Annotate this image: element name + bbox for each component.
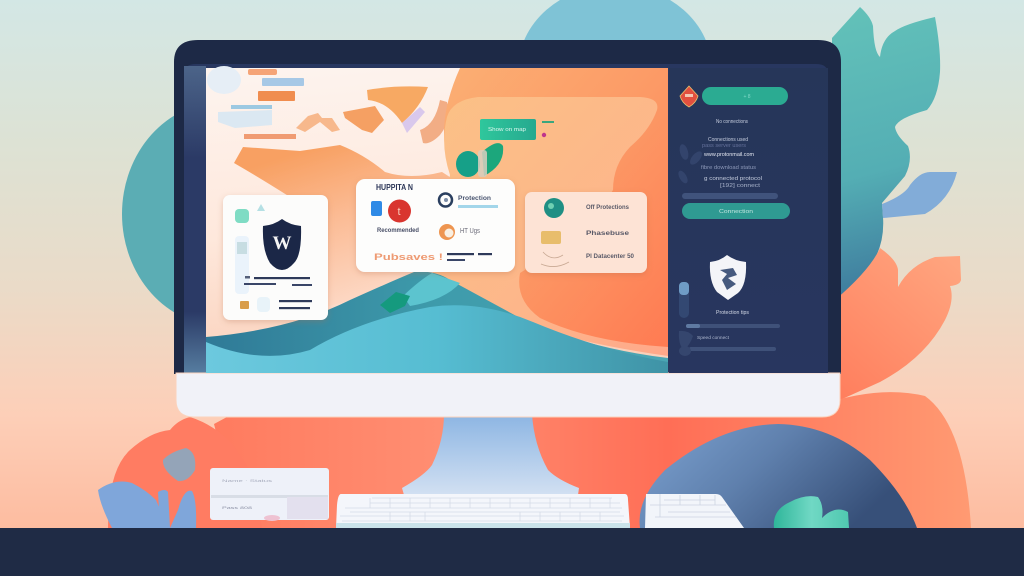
line one — [254, 277, 310, 279]
desk card — [210, 468, 329, 521]
track — [679, 282, 689, 318]
line six: g connected protocol — [704, 176, 762, 182]
track — [686, 324, 780, 328]
balloon — [544, 198, 564, 218]
badge glyph: t — [397, 206, 401, 218]
red badge — [388, 200, 411, 222]
blue icon — [371, 201, 382, 216]
line five — [279, 307, 310, 309]
monitor stand — [402, 414, 579, 495]
highlight — [548, 203, 554, 209]
bottom front wave — [206, 305, 668, 373]
orb centre — [478, 150, 487, 177]
blue tag — [262, 78, 304, 86]
fill — [686, 324, 700, 328]
gem highlight — [685, 94, 693, 97]
orange leaf — [835, 248, 961, 400]
key dividers — [370, 498, 610, 521]
left glass strip — [184, 66, 206, 373]
orb left — [456, 151, 480, 177]
green action button — [682, 203, 790, 219]
card text: Name · Status — [222, 478, 272, 483]
stat three label: Pl Datacenter 50 — [586, 254, 635, 260]
globe badge — [207, 66, 241, 94]
sidebar faint leaves — [676, 143, 704, 185]
ring core — [444, 228, 454, 238]
leaf one — [678, 143, 690, 161]
gold icon — [240, 301, 249, 309]
cloud core — [444, 198, 448, 202]
pill — [702, 87, 788, 105]
keyboard body — [336, 494, 630, 528]
gem body — [680, 86, 698, 107]
green balloon icon — [544, 198, 564, 218]
map east coast — [420, 100, 448, 143]
card small text: Pass 808 — [222, 505, 253, 510]
map lavender sliver — [402, 107, 425, 133]
card heading: HUPPITA N — [376, 183, 413, 192]
leaf two — [688, 149, 704, 167]
blue plant — [98, 482, 196, 528]
bullet — [245, 276, 250, 278]
line one: No connections — [716, 119, 748, 125]
right teal leaf — [832, 7, 940, 297]
keyboard — [336, 494, 630, 528]
line three — [292, 284, 312, 286]
monitor chin — [176, 373, 840, 417]
line two — [244, 283, 276, 285]
screen background — [206, 68, 668, 373]
slider bar — [682, 193, 778, 199]
card image panel — [287, 497, 328, 519]
left coral plant — [108, 417, 262, 528]
card base — [223, 195, 328, 320]
shield body — [263, 219, 301, 270]
sidebar background — [669, 68, 828, 373]
card base — [356, 179, 515, 272]
green plant — [774, 496, 849, 528]
light blue card — [218, 110, 272, 128]
map centre block — [343, 106, 384, 133]
pale square — [257, 297, 270, 312]
map landmass north — [367, 86, 428, 123]
blue underline — [458, 205, 498, 208]
line one — [447, 253, 474, 255]
card band — [211, 495, 328, 498]
shield monogram: W — [272, 233, 292, 254]
line four — [279, 300, 312, 302]
blue panel — [235, 236, 249, 294]
monitor bezel — [174, 40, 841, 374]
callout dash — [542, 121, 554, 123]
orange button — [258, 91, 295, 101]
light orange panel — [433, 97, 668, 356]
bottom back wave — [206, 272, 668, 373]
row one — [345, 498, 622, 508]
pill label: + 8 — [743, 94, 751, 100]
callout label: Show on map — [488, 127, 526, 133]
bottom dark band — [0, 528, 1024, 576]
small icon two — [679, 346, 691, 356]
left security card — [223, 195, 328, 320]
monitor top glass — [184, 64, 828, 373]
stat two label: Phasebuse — [586, 231, 630, 237]
top blue blob — [518, 0, 712, 155]
dark lines — [447, 253, 492, 261]
green status icon — [235, 209, 249, 223]
blue mound — [640, 424, 917, 528]
ring label: HT Ugs — [460, 228, 480, 235]
line four: www.protonmail.com — [704, 152, 754, 158]
numeric keypad — [645, 494, 744, 528]
small heart icon — [679, 331, 693, 350]
light blue bar — [231, 105, 272, 109]
monitor — [174, 40, 841, 417]
right stats card — [525, 192, 647, 273]
decorative background shapes — [98, 0, 971, 528]
handle — [679, 282, 689, 295]
white shield icon — [710, 255, 746, 300]
teal fin shape — [403, 273, 460, 306]
large coral base shape — [214, 392, 971, 528]
progress bar one — [686, 324, 780, 328]
line five: fibre download status — [701, 165, 757, 171]
main screen — [206, 66, 668, 373]
curve icon — [541, 252, 569, 267]
pink blot — [264, 515, 280, 521]
card base — [525, 192, 647, 273]
sidebar panel — [669, 68, 828, 373]
orange label bar — [244, 134, 296, 139]
green callout — [480, 119, 554, 140]
map landmass large — [234, 145, 470, 320]
blue triangle — [257, 204, 265, 211]
line seven: [192] connect — [720, 183, 761, 189]
orange tag — [248, 69, 277, 75]
card body — [210, 468, 329, 520]
ring — [439, 224, 455, 240]
badge circle — [388, 200, 411, 222]
left teal circle — [122, 102, 322, 326]
line two — [478, 253, 492, 255]
green fin shape — [380, 292, 410, 313]
keyboard keys — [340, 498, 624, 521]
shield body — [710, 255, 746, 300]
keyboard base glow — [336, 523, 630, 528]
green pill button — [702, 87, 788, 105]
cloud label: Protection — [458, 196, 491, 202]
map legend tags — [207, 66, 304, 139]
line three: pass server users — [702, 143, 747, 149]
orange ring icon — [439, 224, 455, 240]
button shape — [682, 203, 790, 219]
callout pill — [480, 119, 536, 140]
shield caption: Protection tips — [716, 310, 750, 316]
shield emblem — [720, 268, 737, 290]
button label: Connection — [719, 209, 753, 215]
keypad keys — [650, 494, 736, 517]
blue leaf — [882, 172, 957, 218]
line three — [447, 259, 465, 261]
map island cluster — [296, 113, 340, 132]
gray leaf — [163, 448, 195, 481]
red gem icon — [680, 86, 698, 107]
left label: Recommended — [377, 228, 419, 234]
callout dot — [542, 133, 546, 137]
gold card icon — [541, 231, 561, 244]
text lines — [244, 276, 312, 309]
sidebar text list — [701, 119, 762, 189]
row two — [340, 512, 624, 521]
orange region — [433, 68, 668, 353]
line two: Connections used — [708, 137, 748, 143]
centre card — [356, 179, 515, 272]
leaf three — [676, 169, 690, 185]
keypad body — [645, 494, 744, 528]
progress bar two — [689, 347, 776, 351]
stat one label: Off Protections — [586, 205, 630, 211]
small grid icon — [237, 242, 247, 254]
small caption: Speed connect — [697, 335, 730, 340]
cloud icon — [439, 194, 452, 206]
orb right — [482, 143, 503, 176]
cloud ring — [439, 194, 452, 206]
world map — [234, 86, 470, 320]
green location orb — [456, 143, 503, 177]
orange headline: Pubsaves ! — [374, 252, 443, 262]
slider thumb — [679, 282, 689, 318]
bottom icons — [240, 297, 270, 312]
